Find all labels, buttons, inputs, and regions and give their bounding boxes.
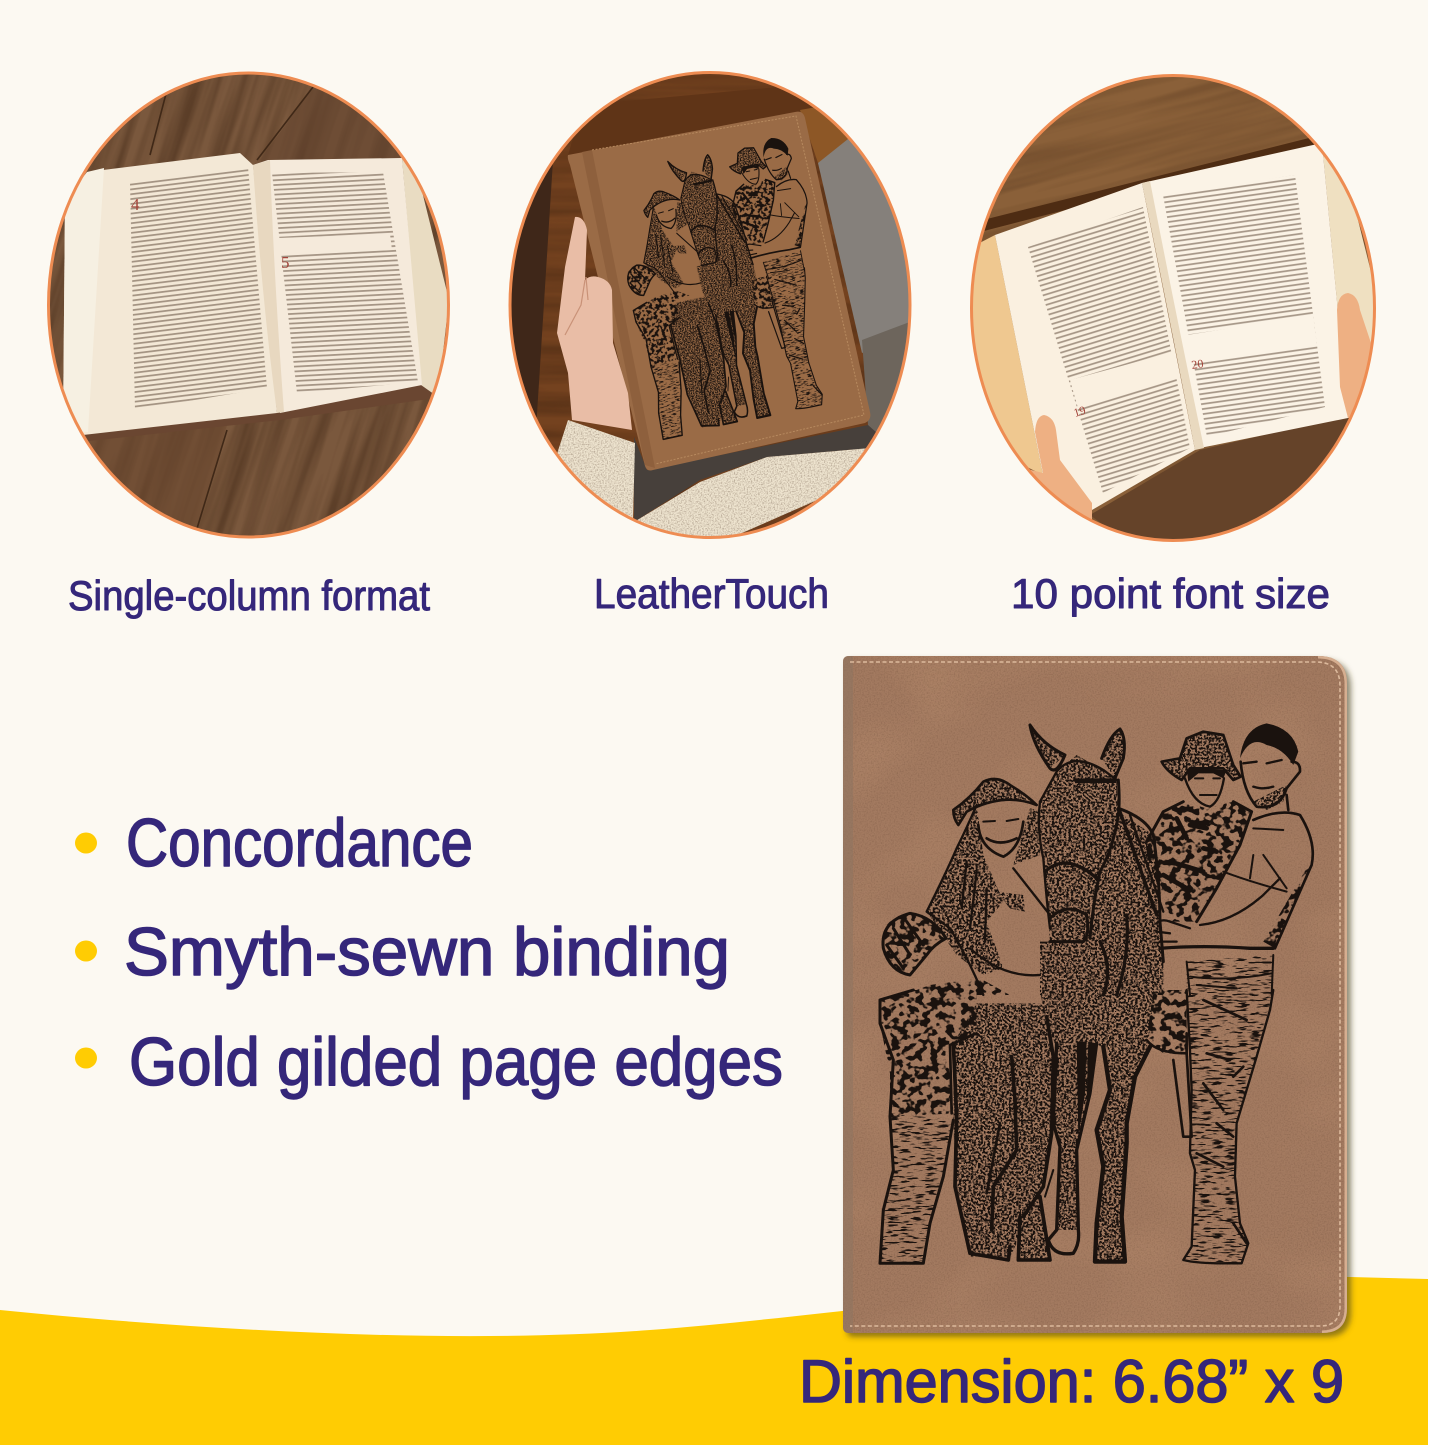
knit sleeve and sweater <box>555 420 870 540</box>
door frame at left <box>512 164 553 418</box>
left page block <box>973 235 1042 473</box>
left page <box>995 183 1195 510</box>
caption: single-column format: Single-column format <box>68 572 430 619</box>
photo: hands holding open bible, 10 point font: 20 <box>1190 356 1204 372</box>
page text lines <box>130 169 267 408</box>
right fore-edge <box>1323 156 1373 343</box>
photo: hands holding open bible, 10 point font: 19 <box>1072 403 1087 420</box>
yellow wave band <box>0 1277 1428 1445</box>
leather book <box>568 112 870 470</box>
bullet 3 <box>75 1048 97 1068</box>
right page <box>1142 143 1348 448</box>
feature: gold gilded page edges: Gold gilded page edges <box>129 1024 783 1100</box>
photo: open bible on wood table, single-column <box>47 72 450 538</box>
photo: open bible on wood table, single-column: 4 <box>131 195 140 214</box>
right hand <box>1337 293 1371 418</box>
engraved family portrait <box>627 138 823 440</box>
photo: hands holding open bible, 10 point font <box>707 0 1445 783</box>
caption: 10 point font size: 10 point font size <box>1011 570 1330 617</box>
photo: open bible on wood table, single-column: 5 <box>281 253 290 272</box>
left page block <box>63 153 277 435</box>
feature: smyth-sewn binding: Smyth-sewn binding <box>124 914 730 990</box>
feature: concordance: Concordance <box>126 805 473 881</box>
stitching <box>850 662 1340 1326</box>
engraved family portrait <box>880 723 1313 1263</box>
engraved leather bible cover <box>843 656 1347 1333</box>
right page fore-edge <box>402 158 449 397</box>
caption: LeatherTouch: LeatherTouch <box>594 570 829 617</box>
text <box>1028 207 1190 492</box>
bullet 1 <box>75 832 97 854</box>
book covers under the pages <box>85 386 426 441</box>
holding hand <box>557 217 632 430</box>
dimension label: Dimension: 6.68” x 9 <box>799 1348 1344 1415</box>
feature list <box>75 805 783 1100</box>
bullet 2 <box>75 940 97 962</box>
book cover edge <box>975 136 1320 232</box>
left hand <box>1030 415 1092 520</box>
grey cushion <box>818 135 915 353</box>
right page <box>253 158 422 413</box>
gutter shade <box>1142 181 1204 450</box>
photo: hand holding engraved leather bible <box>505 65 915 545</box>
dark trousers <box>634 425 885 522</box>
gutter <box>253 160 284 413</box>
